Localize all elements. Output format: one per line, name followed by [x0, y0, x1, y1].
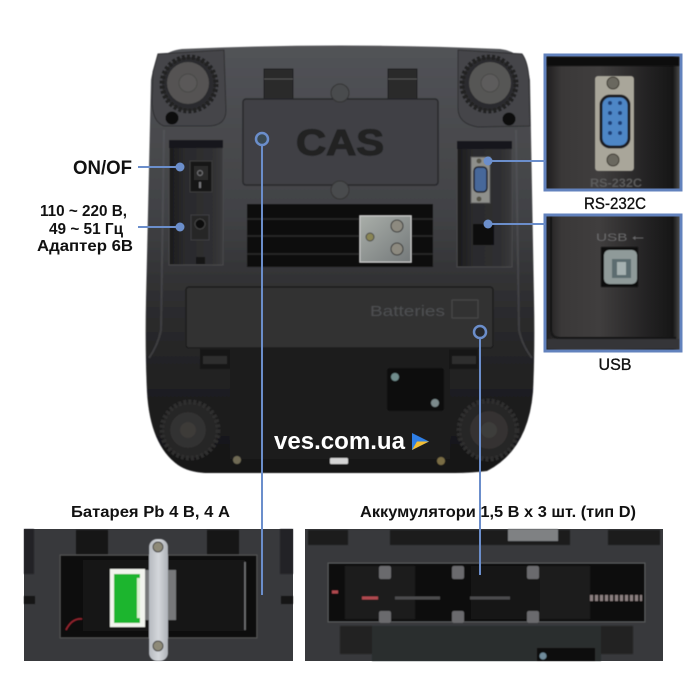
grille opening	[247, 204, 433, 267]
battery bay	[328, 563, 645, 622]
label: power specs: 49 ~ 51 Гц	[49, 221, 123, 238]
icon: play triangle	[412, 433, 429, 450]
left recess	[169, 140, 223, 265]
metal strap	[149, 539, 168, 661]
lead battery	[83, 560, 245, 631]
USB embossed label: USB ⭠	[596, 232, 644, 244]
label: power specs: 110 ~ 220 В,	[40, 203, 127, 220]
foot bottom right	[459, 401, 517, 459]
label: power specs	[37, 203, 133, 255]
contact clips	[379, 566, 539, 623]
latch left	[200, 349, 230, 369]
label: USB: USB	[598, 355, 632, 374]
right recess	[457, 141, 512, 267]
callout: usb pointer	[484, 220, 545, 228]
hatch rectangle	[387, 368, 444, 411]
scale body	[146, 46, 534, 473]
top cover	[243, 84, 438, 199]
power jack	[191, 215, 209, 240]
metal bracket	[360, 216, 411, 262]
callout: jack pointer	[138, 222, 184, 232]
panel: USB close-up	[545, 215, 681, 351]
heading: lead battery: Батарея Pb 4 В, 4 А	[71, 504, 230, 521]
latch right	[449, 349, 478, 369]
embossed port label: RS-232C	[590, 176, 642, 190]
green battery label	[110, 569, 145, 627]
heading: rechargeable batteries: Аккумулятори 1,5 В х 3 шт. (тип D)	[360, 504, 636, 521]
battery compartment	[60, 555, 257, 638]
power switch	[190, 161, 212, 192]
panel: RS-232C close-up	[545, 55, 681, 190]
panel: lead battery photo	[24, 529, 293, 661]
website watermark: ves.com.ua	[274, 428, 406, 455]
batteries embossed label: Batteries	[370, 303, 445, 320]
scale underside photo	[146, 46, 534, 473]
callout: switch pointer	[138, 162, 184, 172]
side edge highlights	[149, 130, 532, 358]
foot top left	[162, 57, 216, 124]
red wire	[66, 619, 82, 630]
battery cover	[186, 287, 493, 348]
foot top right	[462, 57, 516, 126]
foot bottom left	[162, 402, 218, 458]
USB-B socket	[601, 247, 638, 287]
foot well top left	[152, 50, 226, 126]
label: ON/OF: ON/OF	[73, 158, 132, 179]
D-sub connector	[595, 76, 634, 171]
bracket under strap	[143, 570, 176, 620]
label: RS-232C: RS-232C	[584, 194, 646, 213]
callout: accumulators leader line	[474, 326, 486, 575]
lower latches	[340, 626, 372, 654]
lower dark section	[200, 349, 478, 465]
CAS logo: CAS	[296, 122, 384, 163]
panel: D-cell compartment photo	[305, 529, 663, 661]
callout: battery leader line	[256, 133, 268, 595]
foot well top right	[458, 50, 530, 127]
serial port	[471, 157, 490, 203]
usb port	[473, 224, 494, 245]
hinge tabs top	[264, 69, 417, 99]
label: power specs: Адаптер 6В	[37, 238, 133, 255]
coil springs	[590, 595, 642, 601]
callout: serial pointer	[484, 156, 545, 166]
